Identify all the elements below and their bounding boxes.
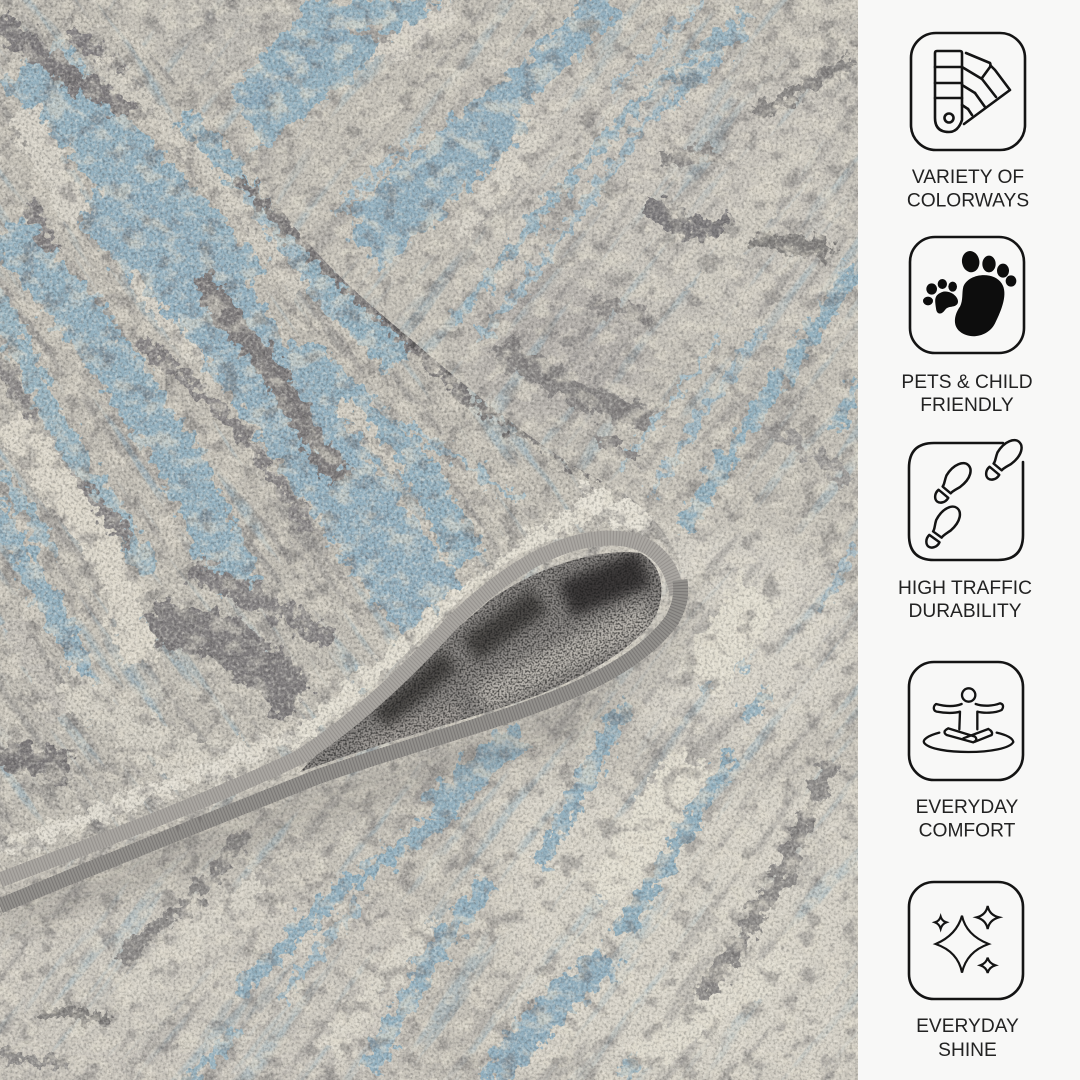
label: everyday comfort: COMFORT bbox=[919, 820, 1016, 842]
label: high traffic durability: DURABILITY bbox=[908, 601, 1022, 622]
icon: paw and child footprint bbox=[910, 237, 1024, 353]
fine directional streaks on roll bbox=[0, 0, 700, 900]
lower stitched binding bbox=[0, 580, 681, 906]
blue top band bbox=[232, 0, 445, 150]
photo: rug floor surface bbox=[0, 0, 858, 1080]
panel: feature sidebar bbox=[858, 0, 1080, 1080]
icon: sparkles bbox=[909, 882, 1023, 999]
fine directional grey and blue streaks bbox=[0, 0, 858, 1080]
icon: colour swatch fan bbox=[911, 33, 1025, 150]
label: everyday shine: SHINE bbox=[938, 1040, 997, 1061]
label: high traffic durability: HIGH TRAFFIC bbox=[898, 578, 1032, 599]
icon: footprints high traffic bbox=[909, 435, 1026, 560]
blue lower bands bbox=[620, 755, 730, 935]
cream patches bbox=[600, 760, 690, 900]
gray patches bbox=[645, 205, 740, 230]
label: variety of colorways: VARIETY OF bbox=[912, 167, 1024, 188]
label: everyday comfort: EVERYDAY bbox=[916, 797, 1019, 818]
blue right bands bbox=[682, 270, 855, 530]
gray streaks on roll bbox=[0, 20, 130, 110]
photo: rolled rug corner bbox=[0, 0, 700, 906]
upper stitched binding bbox=[0, 538, 677, 880]
blue streaks on roll bbox=[30, 60, 240, 290]
shadow below rolled edge bbox=[0, 590, 685, 925]
label: pets and child friendly: PETS & CHILD bbox=[901, 372, 1033, 393]
label: pets and child friendly: FRIENDLY bbox=[920, 395, 1014, 416]
floor tone patches bbox=[0, 0, 858, 1080]
label: variety of colorways: COLORWAYS bbox=[907, 190, 1029, 212]
floor streaks bbox=[0, 0, 858, 1080]
icon: person sitting cross-legged bbox=[909, 662, 1023, 780]
rug underside pocket bbox=[300, 552, 662, 772]
cream patches on roll bbox=[20, 110, 80, 220]
label: everyday shine: EVERYDAY bbox=[916, 1016, 1019, 1037]
